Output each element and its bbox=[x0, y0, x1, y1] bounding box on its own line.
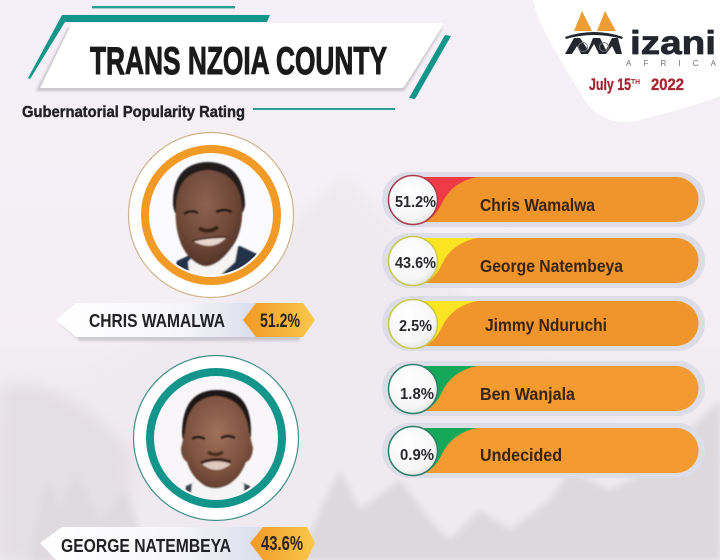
date: TH bbox=[631, 77, 640, 86]
value: 2.5% bbox=[399, 318, 432, 335]
teal slash right bbox=[409, 35, 451, 99]
orange bar bbox=[425, 238, 698, 283]
pill frame bbox=[382, 423, 705, 478]
banner shadow bbox=[36, 28, 443, 91]
name: George Natembeya bbox=[480, 256, 623, 276]
white banner panel bbox=[40, 23, 443, 88]
bar: George Natembeya 43.6% bbox=[382, 233, 705, 288]
subtitle rule bbox=[253, 108, 395, 110]
orange bar bbox=[425, 177, 698, 222]
value badge bbox=[243, 303, 315, 337]
red wedge bbox=[388, 177, 498, 222]
value: 51.2% bbox=[260, 310, 300, 332]
orange bar bbox=[425, 366, 698, 411]
orange bar bbox=[425, 301, 698, 346]
logo panel: Mizani Africa bbox=[533, 0, 720, 122]
green wedge bbox=[388, 428, 498, 473]
value badge bbox=[250, 527, 315, 560]
logo word: izani bbox=[630, 24, 716, 61]
header banner bbox=[22, 6, 451, 121]
photo: man in dark suit bbox=[172, 160, 258, 275]
value: 1.8% bbox=[400, 386, 434, 403]
logo sub word: AFRICA bbox=[626, 59, 717, 68]
green wedge bbox=[388, 366, 498, 411]
name: Undecided bbox=[480, 445, 562, 465]
teal ring bbox=[150, 372, 282, 504]
name: Jimmy Nduruchi bbox=[485, 315, 607, 335]
value ball bbox=[388, 364, 438, 414]
name tag: George Natembeya bbox=[40, 527, 315, 560]
date: July 15 bbox=[589, 75, 631, 94]
date: 2022 bbox=[651, 75, 684, 94]
value ball bbox=[388, 300, 438, 348]
name: Chris Wamalwa bbox=[480, 195, 595, 215]
portrait: Chris Wamalwa bbox=[128, 132, 294, 298]
name: CHRIS WAMALWA bbox=[89, 311, 225, 331]
subtitle: Gubernatorial Popularity Rating bbox=[22, 104, 245, 121]
bar: Ben Wanjala 1.8% bbox=[382, 361, 705, 416]
white blob bbox=[533, 0, 720, 122]
orange ring bbox=[145, 149, 277, 281]
pill frame bbox=[382, 296, 705, 351]
yellow wedge bbox=[388, 238, 498, 283]
name: GEORGE NATEMBEYA bbox=[61, 535, 231, 556]
value: 0.9% bbox=[400, 447, 434, 464]
name tag: Chris Wamalwa bbox=[56, 303, 315, 341]
pill frame bbox=[382, 172, 705, 227]
teal bracket top left bbox=[28, 15, 270, 79]
bar: Undecided 0.9% bbox=[382, 423, 705, 478]
value ball bbox=[388, 176, 438, 224]
portrait: George Natembeya bbox=[134, 356, 298, 520]
value: 43.6% bbox=[395, 255, 436, 272]
tag body bbox=[56, 303, 262, 337]
yellow wedge bbox=[388, 301, 498, 346]
pill frame bbox=[382, 361, 705, 416]
pill frame bbox=[382, 233, 705, 288]
tag shadow bbox=[60, 308, 300, 341]
orange bar bbox=[425, 428, 698, 473]
decorative top teal line bbox=[92, 6, 235, 8]
outer ring bbox=[134, 356, 298, 520]
title: TRANS NZOIA COUNTY bbox=[90, 40, 387, 83]
bar: Jimmy Nduruchi 2.5% bbox=[382, 296, 705, 351]
value ball bbox=[388, 426, 438, 476]
tag shadow bbox=[44, 531, 300, 560]
value ball bbox=[388, 236, 438, 286]
value: 43.6% bbox=[261, 533, 303, 555]
tag body bbox=[40, 527, 268, 560]
icon: mountains and scales bbox=[565, 11, 623, 54]
outer ring bbox=[128, 132, 294, 298]
date bbox=[589, 75, 684, 94]
name: Ben Wanjala bbox=[480, 384, 575, 404]
bar: Chris Wamalwa 51.2% bbox=[382, 172, 705, 227]
value: 51.2% bbox=[395, 194, 436, 211]
photo: man in collared shirt bbox=[181, 390, 253, 505]
